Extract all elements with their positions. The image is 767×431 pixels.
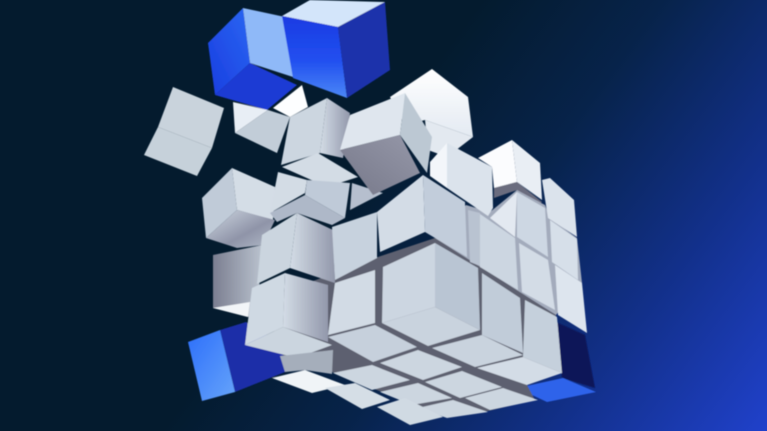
upper right cube with white top [478,140,542,208]
upper row cube middle [332,212,377,280]
blue cube, rear open [208,8,297,110]
right edge backing [435,190,582,315]
upper row cube left [257,213,335,284]
cube cluster [144,0,596,425]
upper center cube [377,175,467,257]
floating left cube [144,87,224,176]
blue cube lower left [188,322,285,401]
right edge cubes [490,178,578,280]
gray shaded rear cube [213,245,262,317]
small cluster cube [270,172,383,225]
bottom grid tiles [333,350,538,418]
lower left cube [245,273,332,358]
lower middle cube [328,270,417,362]
main cube block [245,175,587,418]
lower left floating cube [202,168,275,248]
blue cube, front [282,0,390,98]
diagonal cube between center and right [430,143,493,216]
gap shadow behind main cube block [262,238,561,417]
white cube behind the blue cubes [233,85,308,153]
upper right column tiles [468,210,587,333]
shaded cube under main block [280,350,333,374]
top right white cube [390,69,473,157]
far right column cube [477,300,562,385]
lower loose tiles [272,370,443,425]
right column front cube [432,273,523,367]
blurred gray cube [281,98,358,187]
central large cube [340,93,432,195]
navy cube lower right [517,322,596,402]
front corner cube [382,243,480,346]
